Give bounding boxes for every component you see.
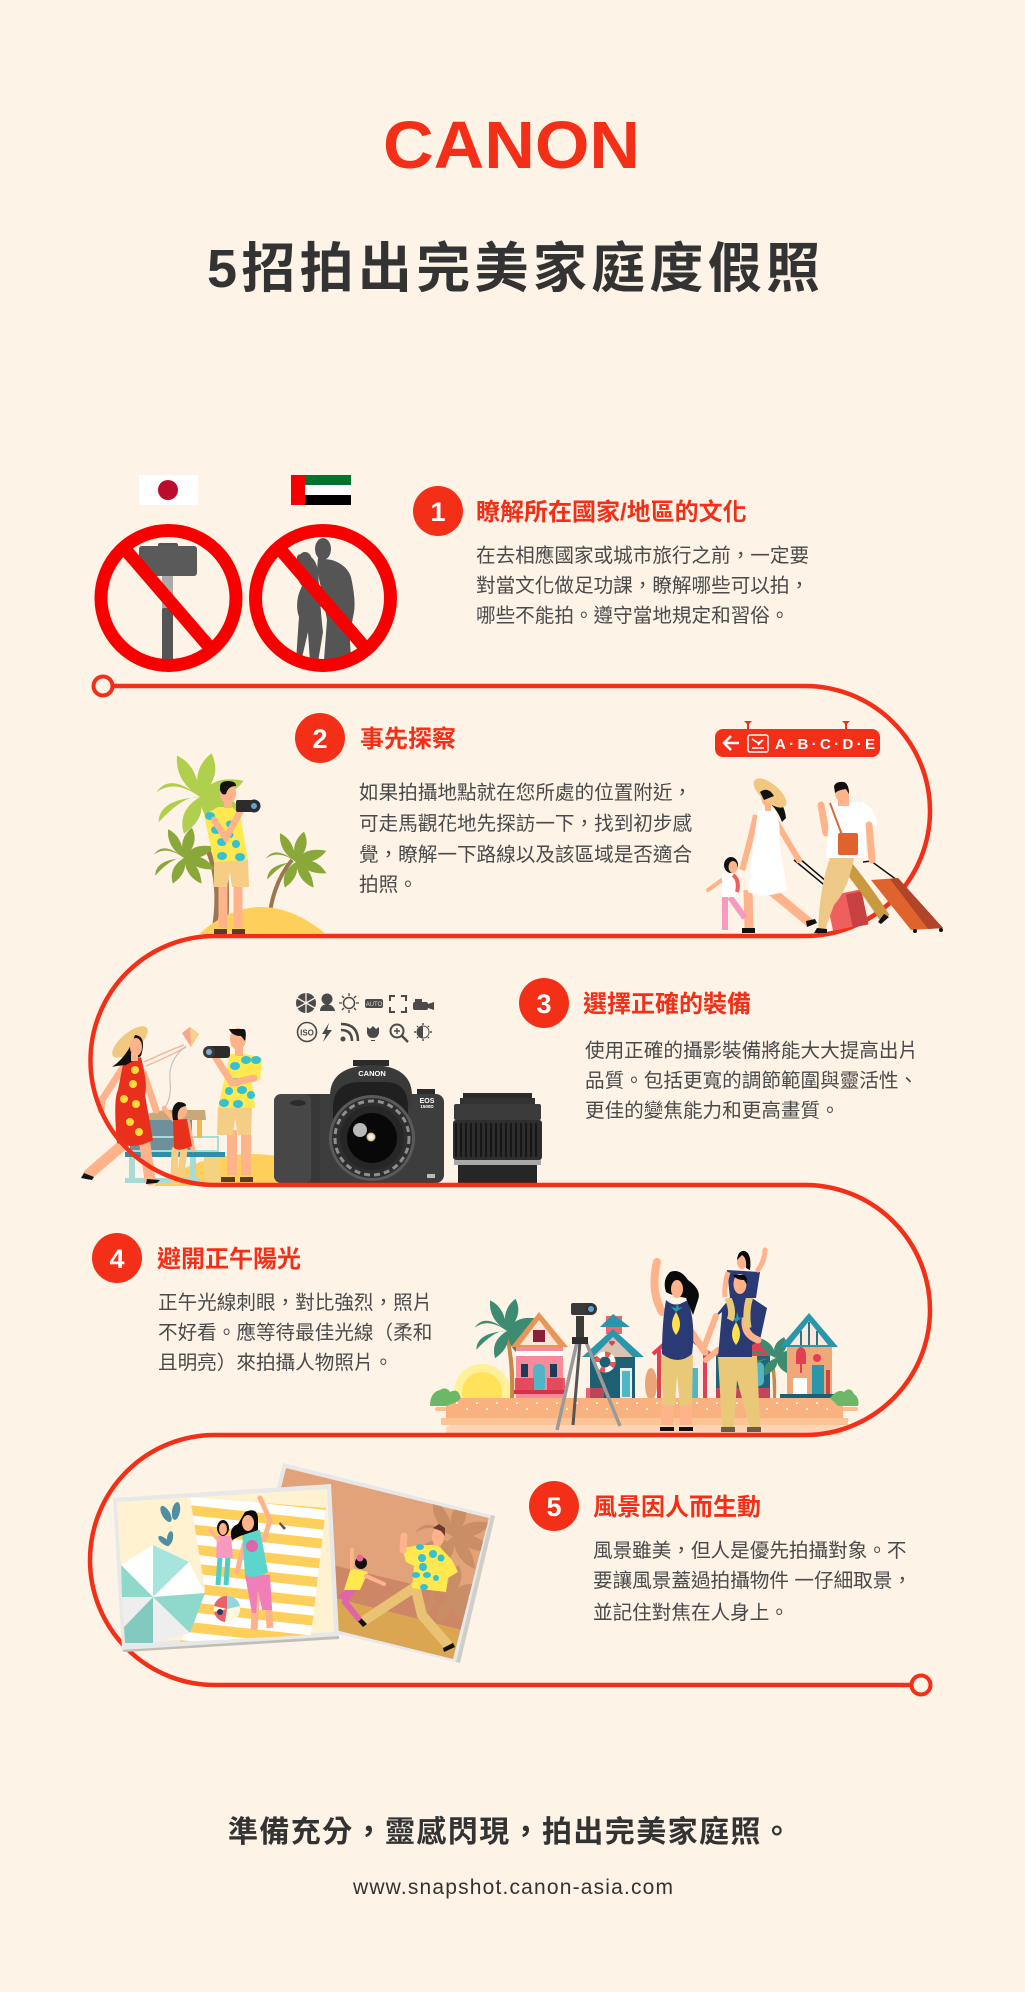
- number badge 3: 3: [536, 989, 552, 1019]
- sun: [454, 1364, 510, 1420]
- kite: [144, 1027, 199, 1110]
- logo: CANON: CANON: [383, 108, 640, 183]
- number badge 5: 5: [546, 1492, 562, 1522]
- section 5 heading: 風景因人而生動: [593, 1494, 761, 1521]
- section 1 body: [476, 544, 809, 627]
- section 5 body: 並記住對焦在人身上。: [593, 1602, 789, 1624]
- woman in navy tank: [654, 1262, 705, 1431]
- umbrella: [121, 1545, 205, 1643]
- section 2 body: 如果拍攝地點就在您所處的位置附近，: [359, 782, 692, 804]
- section 2 heading: 事先探察: [360, 726, 456, 753]
- section 2 body: 拍照。: [359, 874, 418, 896]
- orange suitcase: [863, 861, 943, 933]
- number badge 2: [295, 713, 345, 763]
- section 1 body: 哪些不能拍。遵守當地規定和習俗。: [476, 605, 790, 627]
- section 4 body: 正午光線刺眼，對比強烈，照片: [158, 1292, 432, 1314]
- illustration: beach town with family and tripod: [430, 1250, 858, 1435]
- section 5: [529, 1481, 912, 1624]
- girl dancing: [342, 1550, 384, 1618]
- woman in red dress: [81, 1021, 160, 1184]
- icon row 2: camera settings: [298, 1022, 432, 1042]
- illustration: family with kite, hut and camera gear: [81, 993, 542, 1186]
- girl: [210, 1520, 240, 1585]
- right teal house behind man: [712, 1340, 770, 1398]
- section 5 body: 風景雖美，但人是優先拍攝對象。不: [593, 1540, 906, 1562]
- icon: no selfie stick: [101, 530, 236, 666]
- towel stripes: [180, 1497, 326, 1642]
- section 1 body: 對當文化做足功課，瞭解哪些可以拍，: [476, 575, 809, 597]
- title: 5招拍出完美家庭度假照: [207, 239, 824, 299]
- man in white shirt: [814, 782, 889, 933]
- camera body with lens: [274, 1060, 444, 1183]
- beach hut: [120, 1110, 225, 1183]
- number badge 2: 2: [312, 724, 328, 754]
- sand mound: [153, 1154, 277, 1186]
- number badge 1: 1: [430, 497, 446, 527]
- route line: [90, 676, 930, 1694]
- section 2 body: [359, 782, 692, 896]
- pink house: [511, 1312, 568, 1398]
- section 2 body: 覺，瞭解一下路線以及該區域是否適合: [359, 844, 692, 866]
- child: [708, 857, 745, 930]
- spare lens: [453, 1093, 542, 1183]
- illustration: family with suitcases: [708, 773, 943, 933]
- illustration: man with camera under palms: [154, 753, 326, 934]
- woman: [231, 1498, 272, 1630]
- section 3 body: 使用正確的攝影裝備將能大大提高出片: [585, 1040, 918, 1062]
- man with camera: [203, 1028, 262, 1182]
- flip flops: [157, 1501, 182, 1548]
- section 5 body: 要讓風景蓋過拍攝物件 一仔細取景，: [593, 1570, 912, 1592]
- section 3: [519, 978, 918, 1122]
- section 2 body: 可走馬觀花地先探訪一下，找到初步感: [359, 813, 692, 835]
- footer url: www.snapshot.canon-asia.com: [352, 1876, 673, 1899]
- right palm: [746, 1337, 806, 1398]
- camera body with lens: EOS: [420, 1098, 435, 1105]
- illustration: back photo: [277, 1463, 495, 1663]
- number badge 4: [92, 1233, 142, 1283]
- surfboard: [645, 1368, 657, 1400]
- section 4 heading: 避開正午陽光: [157, 1246, 301, 1273]
- woman in white dress: [742, 773, 817, 933]
- icon row 2: camera settings: ISO: [300, 1028, 314, 1038]
- coral suitcase: [794, 859, 869, 931]
- flag: Japan: [139, 475, 198, 505]
- gate sign: [715, 721, 880, 757]
- section 3 body: [585, 1040, 918, 1122]
- section 4 body: [158, 1292, 432, 1374]
- platform: [435, 1398, 858, 1435]
- section 1 body: 在去相應國家或城市旅行之前，一定要: [476, 544, 809, 567]
- icon row 1: camera modes: AUTO: [366, 1002, 383, 1008]
- section 3 heading: 選擇正確的裝備: [583, 991, 751, 1018]
- number badge 5: [529, 1481, 579, 1531]
- beach ball: [214, 1596, 240, 1622]
- teal house: [582, 1314, 644, 1398]
- section 3 body: 品質。包括更寬的調節範圍與靈活性、: [585, 1070, 918, 1092]
- number badge 4: 4: [109, 1244, 125, 1274]
- tripod camera: [557, 1303, 620, 1430]
- camera body with lens: CANON: [358, 1069, 386, 1078]
- gate sign: A·B·C·D·E: [775, 736, 875, 753]
- illustration: front photo: [113, 1484, 339, 1662]
- flag: UAE: [291, 475, 351, 505]
- palms: [154, 753, 326, 930]
- man with child on shoulders: [705, 1250, 767, 1432]
- child in red shirt: [164, 1102, 193, 1181]
- sand mound: [199, 907, 326, 934]
- section 1: [413, 486, 809, 627]
- section 4: [92, 1233, 432, 1374]
- man: [204, 781, 260, 934]
- red and white house: [653, 1330, 710, 1398]
- number badge 1: [413, 486, 463, 536]
- icon: no public affection: [256, 530, 390, 666]
- sunglasses: [279, 1522, 286, 1530]
- section 1 heading: 瞭解所在國家/地區的文化: [476, 498, 747, 526]
- left palm: [475, 1299, 539, 1398]
- man dancing: [355, 1524, 458, 1652]
- camera body with lens: 1500D: [420, 1104, 434, 1109]
- number badge 3: [519, 978, 569, 1028]
- bushes: [430, 1388, 858, 1406]
- palm shadows: [415, 1504, 488, 1621]
- orange house: [780, 1313, 838, 1398]
- icon row 1: camera modes: [296, 993, 434, 1013]
- footer tagline: 準備充分，靈感閃現，拍出完美家庭照。: [228, 1815, 793, 1849]
- section 4 body: 且明亮）來拍攝人物照片。: [158, 1352, 393, 1374]
- section 4 body: 不好看。應等待最佳光線（柔和: [158, 1321, 432, 1344]
- section 3 body: 更佳的變焦能力和更高畫質。: [585, 1100, 840, 1122]
- section 5 body: [593, 1540, 912, 1624]
- section 2: [295, 713, 692, 896]
